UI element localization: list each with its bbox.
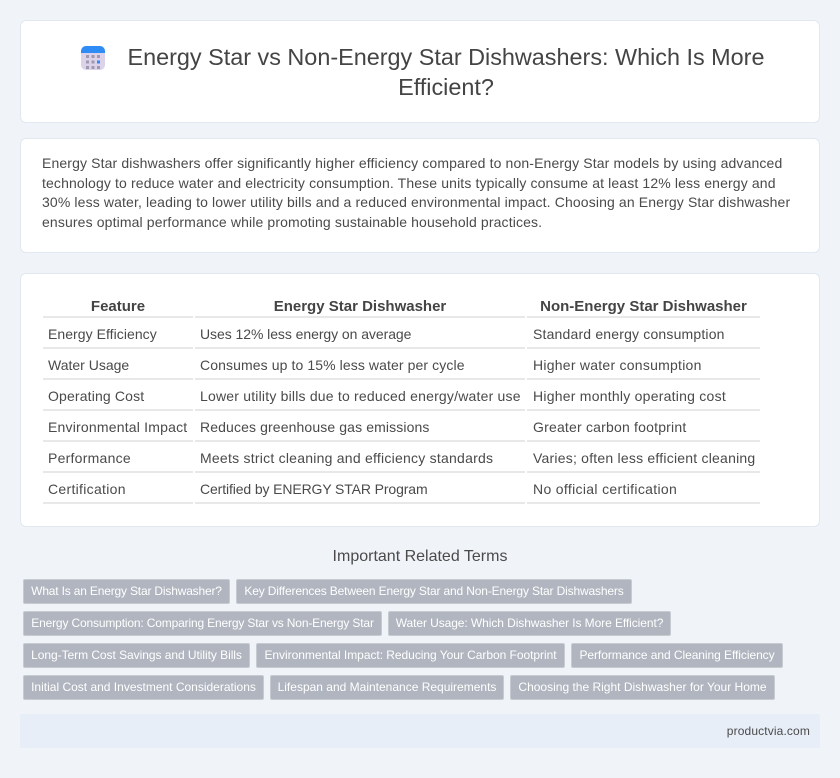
icon: calendar grid — [81, 46, 105, 70]
row: certification: Certification — [48, 481, 126, 497]
header panel — [20, 20, 820, 123]
row: environmental impact: Greater carbon footprint — [533, 419, 686, 435]
tag — [23, 579, 230, 604]
row: water usage: Consumes up to 15% less water per cycle — [200, 357, 465, 373]
tag: Lifespan and Maintenance Requirements — [278, 680, 496, 694]
intro text: 30% less water, leading to lower utility bills and a reduced environmental impact. Choosing an Energy Star dishwasher — [42, 194, 790, 210]
tag — [388, 611, 671, 636]
table header — [43, 298, 760, 318]
row: environmental impact — [43, 419, 760, 442]
tag — [23, 611, 382, 636]
table header: Energy Star Dishwasher — [274, 298, 446, 315]
row: water usage: Water Usage — [48, 357, 129, 373]
row: performance: Varies; often less efficient cleaning — [533, 450, 755, 466]
intro text: Energy Star dishwashers offer significantly higher efficiency compared to non-Energy Star models by using advanced — [42, 155, 782, 171]
row: operating cost — [43, 388, 760, 411]
related terms tags — [23, 579, 783, 700]
row: energy efficiency: Energy Efficiency — [48, 326, 157, 342]
tag — [270, 675, 504, 700]
row: certification — [43, 481, 760, 504]
tag: What Is an Energy Star Dishwasher? — [31, 584, 222, 598]
tag: Energy Consumption: Comparing Energy Star vs Non-Energy Star — [31, 616, 374, 630]
row: operating cost: Operating Cost — [48, 388, 144, 404]
tag: Water Usage: Which Dishwasher Is More Efficient? — [396, 616, 663, 630]
row: energy efficiency — [43, 326, 760, 349]
heading: related terms: Important Related Terms — [333, 548, 507, 565]
tag — [236, 579, 632, 604]
intro text: ensures optimal performance while promoting sustainable household practices. — [42, 214, 542, 230]
tag — [23, 675, 264, 700]
panel: comparison table — [20, 273, 820, 527]
tag: Initial Cost and Investment Considerations — [31, 680, 256, 694]
row: energy efficiency: Uses 12% less energy on average — [200, 326, 411, 342]
row: environmental impact: Reduces greenhouse gas emissions — [200, 419, 430, 435]
row: water usage — [43, 357, 760, 380]
row: operating cost: Lower utility bills due to reduced energy/water use — [200, 388, 521, 404]
row: energy efficiency: Standard energy consumption — [533, 326, 725, 342]
row: water usage: Higher water consumption — [533, 357, 702, 373]
table header: Non-Energy Star Dishwasher — [540, 298, 747, 315]
panel: introduction — [20, 138, 820, 253]
tag: Long-Term Cost Savings and Utility Bills — [31, 648, 242, 662]
row: operating cost: Higher monthly operating cost — [533, 388, 726, 404]
tag — [256, 643, 565, 668]
row: certification: No official certification — [533, 481, 677, 497]
row: performance: Meets strict cleaning and efficiency standards — [200, 450, 493, 466]
row: environmental impact: Environmental Impact — [48, 419, 187, 435]
title: Energy Star vs Non-Energy Star Dishwashers: Which Is More Efficient? — [128, 44, 764, 100]
tag: Choosing the Right Dishwasher for Your Home — [518, 680, 767, 694]
row: performance: Performance — [48, 450, 131, 466]
footer bar — [20, 714, 820, 748]
tag — [510, 675, 775, 700]
table header: Feature — [91, 298, 145, 315]
row: performance — [43, 450, 760, 473]
intro text: technology to reduce water and electricity consumption. These units typically consume at least 12% less energy and — [42, 175, 776, 191]
intro text — [42, 155, 790, 230]
tag: Performance and Cleaning Efficiency — [579, 648, 775, 662]
tag: Key Differences Between Energy Star and Non-Energy Star Dishwashers — [244, 584, 624, 598]
row: certification: Certified by ENERGY STAR Program — [200, 481, 428, 497]
source credit: productvia.com — [727, 724, 810, 738]
tag — [571, 643, 783, 668]
tag — [23, 643, 250, 668]
tag: Environmental Impact: Reducing Your Carbon Footprint — [264, 648, 557, 662]
